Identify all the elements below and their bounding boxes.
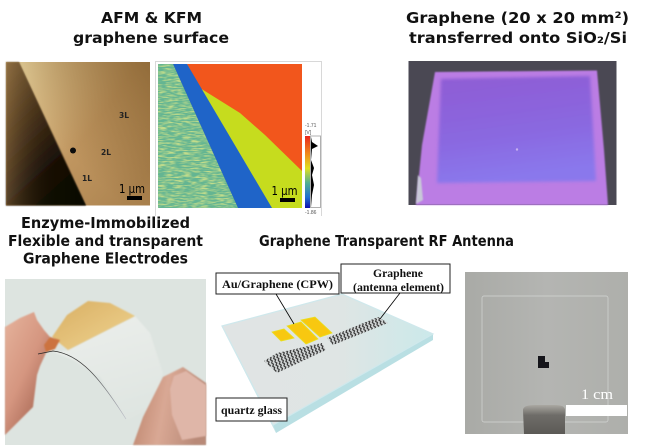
- title: enzyme electrodes: Graphene Electrodes: [23, 250, 188, 268]
- KFM scale bar: [272, 184, 298, 202]
- KFM colour bar: [305, 123, 320, 216]
- label: graphene antenna element: Graphene: [373, 268, 423, 280]
- title: enzyme electrodes: [8, 214, 204, 268]
- title: enzyme electrodes: Flexible and transparent: [8, 232, 204, 250]
- AFM layer labels: 1L: [82, 174, 92, 183]
- photo: fabricated antenna: [465, 272, 628, 434]
- AFM scale bar: 1 µm: [119, 182, 145, 196]
- label: quartz glass: quartz glass: [221, 405, 283, 417]
- title: graphene on SiO2/Si: transferred onto SiO₂/Si: [409, 29, 627, 47]
- thumb nail: [170, 371, 206, 440]
- title: graphene on SiO2/Si: [406, 9, 629, 47]
- scale bar: [566, 387, 627, 416]
- gold coated film: [52, 301, 135, 350]
- AFM image panel: [6, 62, 150, 206]
- gold CPW strips: [272, 317, 332, 344]
- photo: flexible electrode in fingers: [5, 279, 206, 445]
- AFM scale bar: [119, 182, 145, 200]
- photo: graphene on wafer: [408, 61, 616, 205]
- holder clip: [523, 405, 565, 434]
- scale bar: 1 cm: [581, 387, 613, 403]
- right thumb: [133, 367, 206, 445]
- transparent film: [53, 316, 163, 420]
- title: RF antenna: Graphene Transparent RF Antenna: [259, 232, 514, 250]
- KFM scale bar: 1 µm: [272, 184, 298, 198]
- AFM marker dot: [70, 148, 76, 154]
- KFM colour bar: -1.71: [305, 123, 317, 129]
- left finger: [5, 312, 52, 435]
- KFM colour bar: [V]: [305, 130, 312, 136]
- title: enzyme electrodes: Enzyme-Immobilized: [21, 214, 190, 232]
- glass outline: [482, 296, 608, 422]
- graphene antenna elements: [264, 317, 388, 373]
- label: Au/Graphene CPW: [216, 273, 339, 324]
- AFM layer labels: 2L: [101, 148, 111, 157]
- AFM layer labels: 3L: [119, 111, 129, 120]
- label: graphene antenna element: [341, 264, 450, 319]
- antenna diagram: [216, 264, 450, 433]
- AFM layer labels: [82, 111, 129, 183]
- label: Au/Graphene CPW: Au/Graphene (CPW): [222, 279, 333, 291]
- label: graphene antenna element: (antenna element): [353, 282, 444, 294]
- title: AFM and KFM: [73, 9, 229, 47]
- KFM image panel: [156, 62, 322, 216]
- antenna marks: [538, 356, 549, 368]
- quartz glass plate: [222, 294, 433, 433]
- title: graphene on SiO2/Si: Graphene (20 x 20 mm²): [406, 9, 629, 27]
- title: AFM and KFM: AFM & KFM: [101, 9, 202, 27]
- KFM colour bar: -1.86: [305, 210, 317, 216]
- label: quartz glass: [216, 398, 287, 421]
- title: AFM and KFM: graphene surface: [73, 29, 229, 47]
